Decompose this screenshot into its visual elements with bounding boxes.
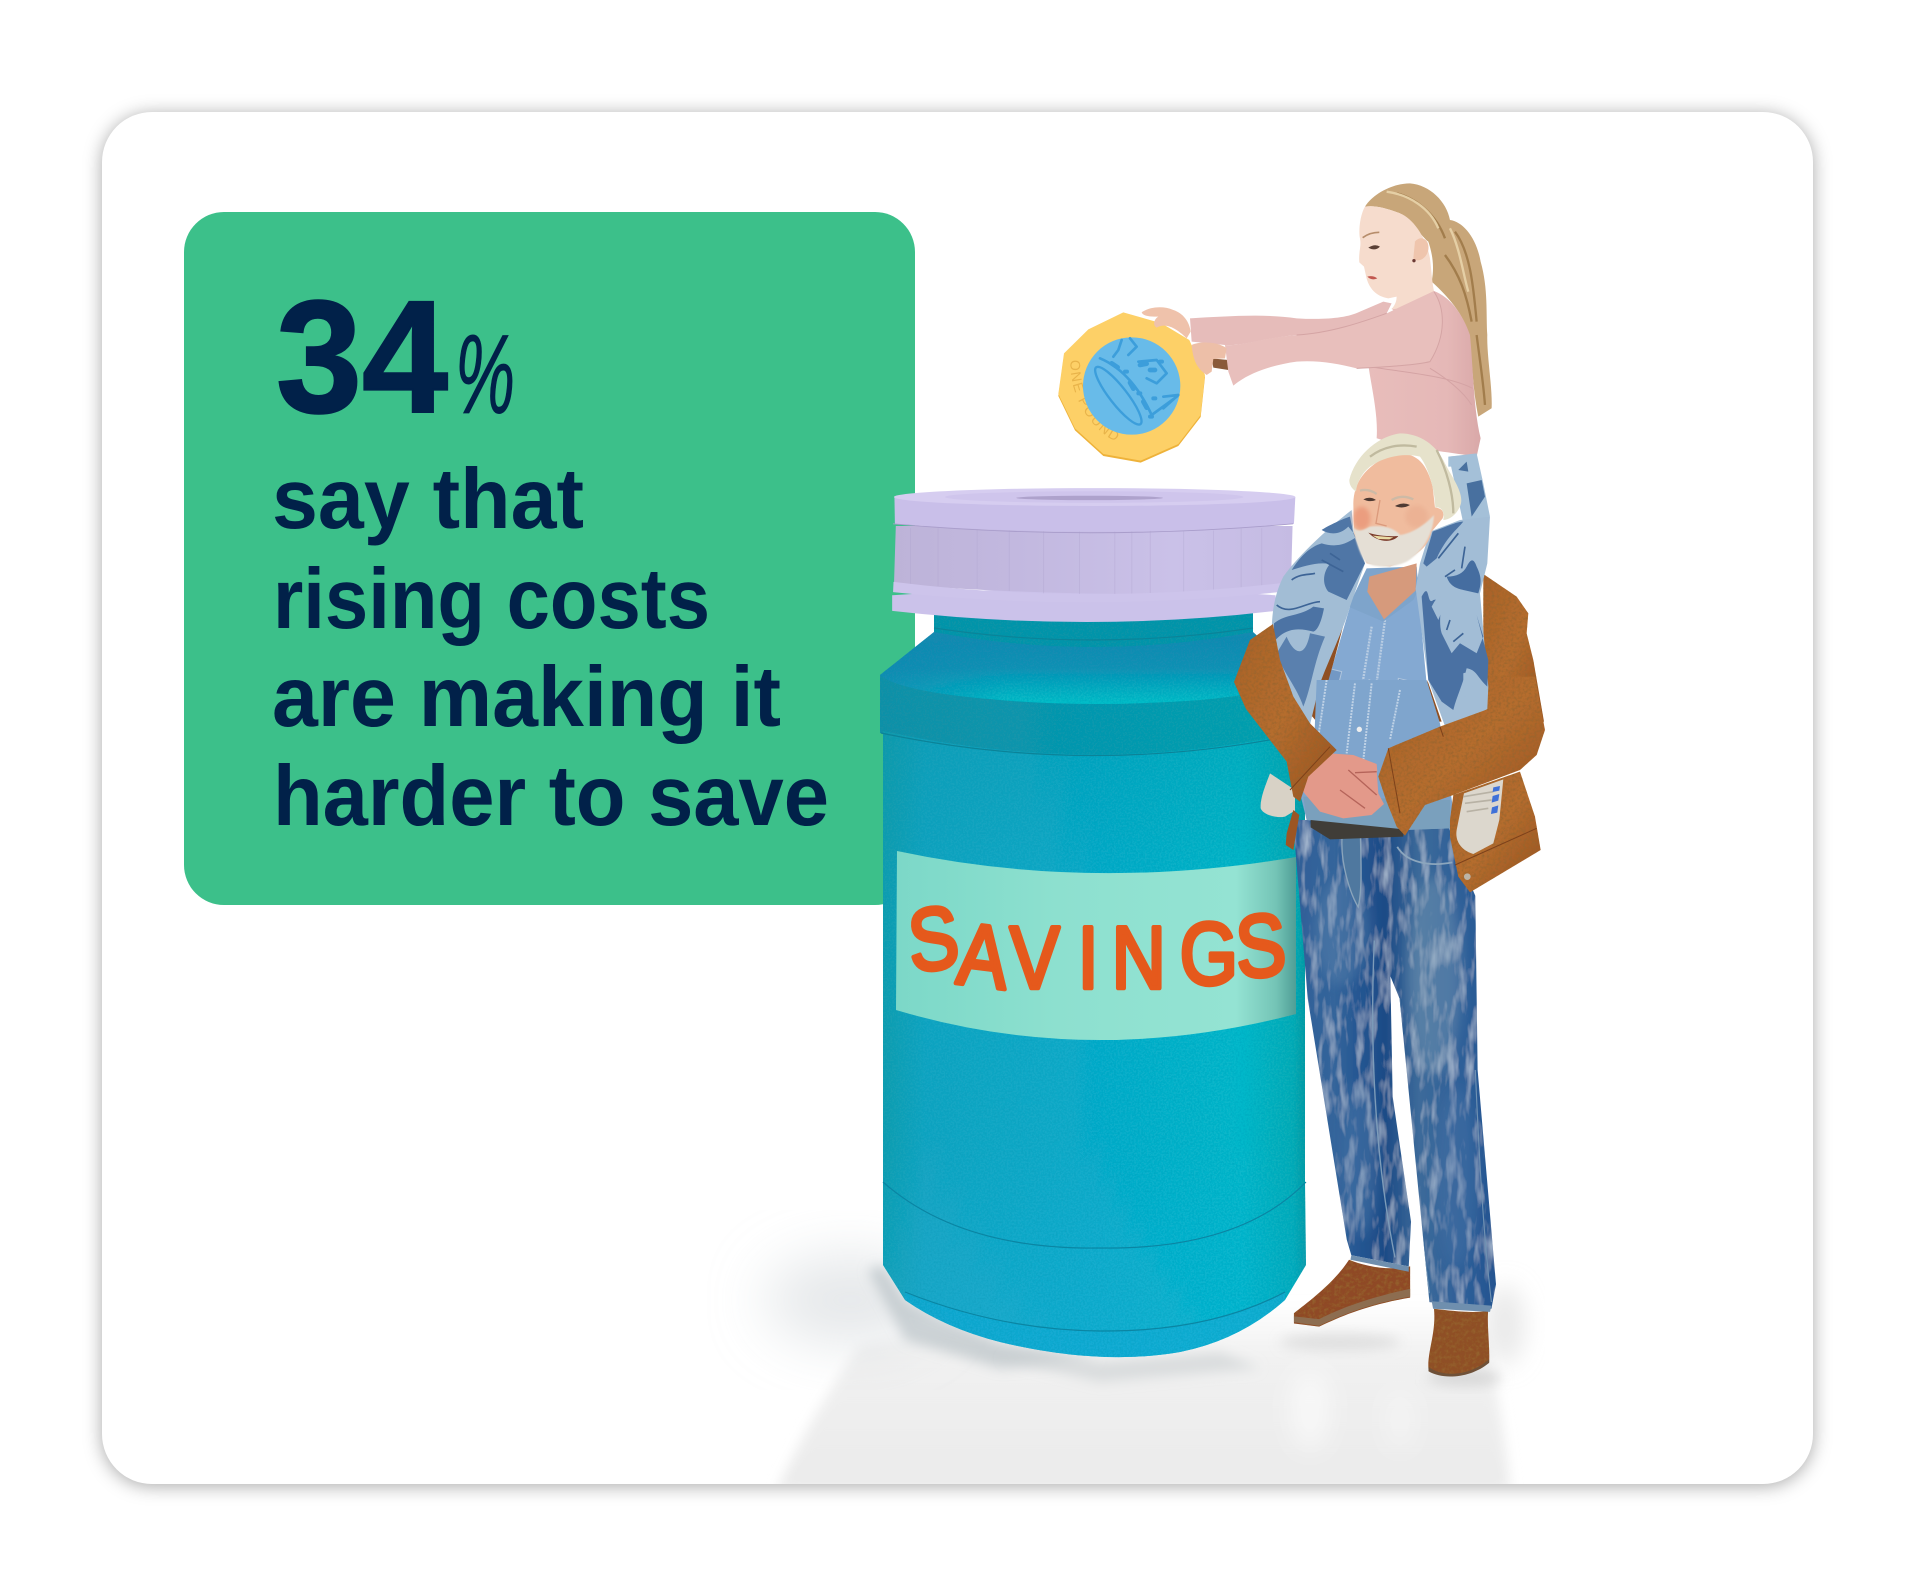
girl <box>1142 183 1492 467</box>
card shadow <box>102 114 1813 1486</box>
girl's sweater back <box>1368 291 1481 457</box>
man's face <box>1353 453 1443 567</box>
lower shirt <box>1300 680 1453 830</box>
man's hands <box>1302 753 1384 818</box>
girl's far shoe <box>1261 773 1295 817</box>
man's mouth <box>1368 533 1398 541</box>
jar neck <box>934 612 1253 648</box>
girl's leg <box>1449 453 1490 523</box>
man's right shoulder <box>1483 574 1544 722</box>
text block: statement: say that <box>272 452 584 547</box>
man's collar <box>1348 567 1418 622</box>
girl's eye, brow, mouth <box>1368 245 1380 249</box>
jar paper shell <box>880 612 1306 1357</box>
man's hair <box>1349 433 1461 520</box>
man's right boot <box>1428 1309 1489 1375</box>
coin <box>1058 312 1205 463</box>
man's neck <box>1367 563 1417 619</box>
man's jeans <box>1294 820 1496 1377</box>
girl's face <box>1359 206 1434 309</box>
heading: 34 percent: % <box>455 312 515 437</box>
text block: statement <box>272 452 829 844</box>
heading: 34 percent: 34 <box>276 267 448 446</box>
girl's near arm <box>1225 291 1442 386</box>
girl's ear <box>1413 238 1428 260</box>
jar upper band <box>880 675 1305 756</box>
text block: statement: harder to save <box>273 749 829 844</box>
jacket left hem <box>1286 810 1299 850</box>
jar base <box>905 1292 1285 1357</box>
man's beard <box>1353 515 1434 567</box>
panel: green statistic box <box>184 212 915 905</box>
savings jar <box>880 488 1306 1357</box>
man's belt <box>1311 820 1403 839</box>
scarf left <box>1272 510 1365 732</box>
man's shirt <box>1317 567 1430 720</box>
jar lid <box>892 488 1295 622</box>
scarf right <box>1416 517 1490 734</box>
girl's far hand <box>1142 307 1191 338</box>
girl's near hand <box>1192 343 1227 375</box>
girl's jeans <box>1448 454 1477 467</box>
man's eyes <box>1363 498 1410 507</box>
text block: statement: are making it <box>272 650 781 745</box>
floor and shadows <box>765 1255 1525 1490</box>
girl's near hand gap <box>1212 358 1228 370</box>
girl's far arm <box>1190 302 1392 345</box>
man <box>1234 433 1545 1377</box>
jacket right hem <box>1450 772 1541 892</box>
label text: SAVINGS: SAVINGS <box>904 888 1289 1008</box>
white card panel <box>102 112 1813 1484</box>
coin centre <box>1083 337 1180 435</box>
girl's near shoe <box>1456 779 1503 854</box>
ponytail and hair <box>1365 183 1492 417</box>
coin lettering: ONE POUND <box>1070 360 1118 440</box>
jar body <box>883 731 1306 1357</box>
text block: statement: rising costs <box>273 552 710 647</box>
jar label <box>896 851 1296 1040</box>
man's lower body <box>1234 624 1545 892</box>
man's upper body <box>1272 433 1544 734</box>
man's left sleeve <box>1234 624 1337 802</box>
man's right sleeve <box>1378 677 1545 836</box>
man's left boot <box>1294 1260 1410 1327</box>
jacket inner lining <box>1307 610 1442 722</box>
crown emblem <box>1089 338 1178 429</box>
jar shoulder <box>880 632 1305 711</box>
